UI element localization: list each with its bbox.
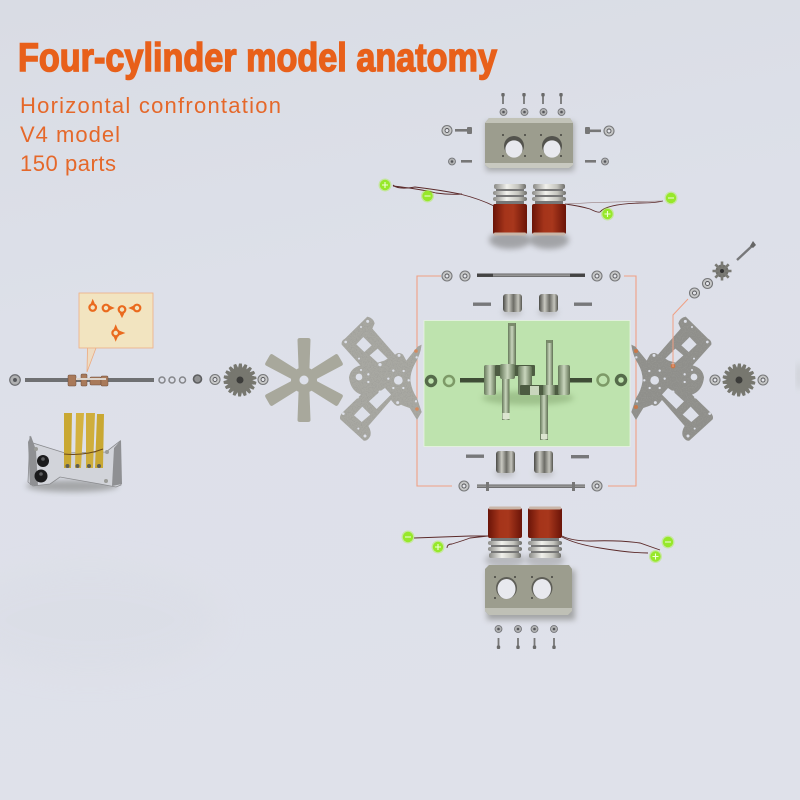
polarity markers: [402, 530, 674, 563]
mounting plate: [485, 118, 574, 171]
upper tie rod and nuts: [442, 271, 620, 281]
lower tie rod and nuts: [459, 481, 602, 491]
shaft washers and nuts: [159, 374, 268, 384]
upper pistons and pins: [473, 294, 592, 316]
small upper right gear: [712, 262, 732, 280]
mounting plate: [485, 565, 575, 620]
left shaft with bushings: [10, 374, 154, 386]
upper right screw: [737, 241, 756, 260]
side bolts and nuts: [442, 126, 614, 165]
coil wires: [414, 536, 660, 553]
orange dots on left plate: [414, 349, 419, 411]
top screws: [500, 93, 565, 116]
right upper orange connector: [673, 299, 688, 367]
callout box: [79, 293, 153, 348]
text block: specifications: Horizontal confrontation: [20, 93, 281, 118]
cooling fan: [264, 338, 344, 422]
text block: specifications: V4 model: [20, 122, 120, 147]
black terminals: [34, 455, 49, 482]
washers left: [426, 376, 454, 386]
right frame plate: [631, 317, 713, 441]
bottom screws: [495, 626, 558, 649]
panel: crankshaft highlight: [424, 320, 630, 446]
polarity markers: [378, 178, 678, 220]
text block: specifications: [20, 93, 281, 176]
left flywheel gear: [223, 364, 257, 396]
right gear nuts: [710, 375, 768, 385]
text block: specifications: 150 parts: [20, 151, 116, 176]
left orange connector bracket: [417, 276, 452, 486]
brass strips: [64, 413, 104, 468]
washers right: [598, 374, 626, 386]
title: Four-cylinder model anatomy: [18, 36, 498, 80]
upper right nuts: [690, 278, 712, 298]
orange cam icons: [89, 300, 140, 340]
callout: cam lobes: [79, 293, 153, 372]
right flywheel gear: [722, 364, 756, 396]
bottom cylinder head assembly: [402, 506, 674, 649]
coil pair: [485, 506, 565, 568]
brass commutator assembly: [26, 413, 122, 492]
crankshaft: [460, 323, 592, 440]
lower pistons and pins: [466, 451, 589, 477]
top cylinder head assembly: [378, 93, 678, 249]
coil wires: [393, 185, 663, 212]
bracket: [28, 436, 121, 487]
right orange connector bracket: [608, 276, 636, 486]
left frame plate: [340, 317, 422, 441]
callout tail: [87, 348, 96, 372]
coil pair: [489, 184, 569, 249]
